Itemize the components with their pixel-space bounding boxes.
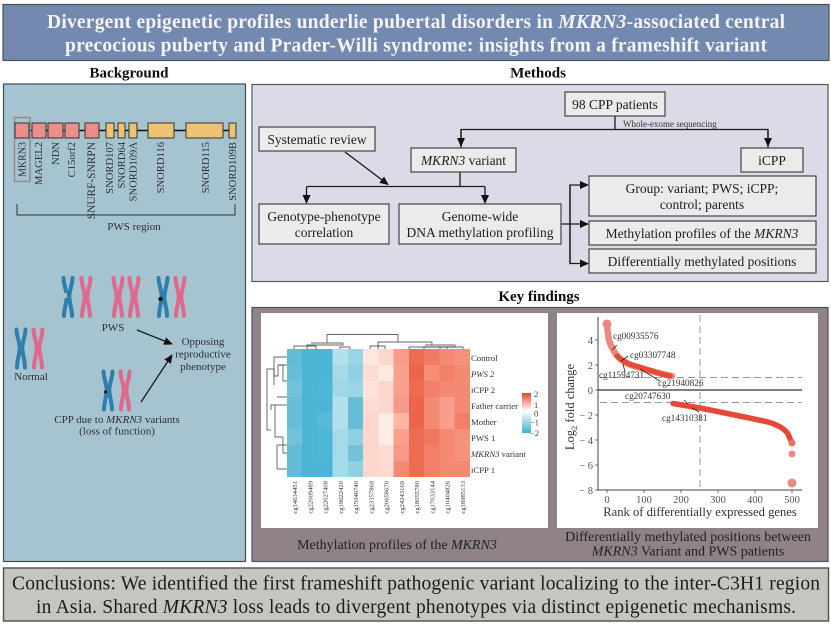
heatmap row labels: MKRN3 variant	[470, 449, 526, 459]
chromosomes: CPP pair	[104, 372, 130, 410]
axes	[595, 317, 802, 493]
top dendrogram	[294, 334, 463, 349]
box: differentially methylated positions: Differentially methylated positions	[608, 254, 796, 269]
colour scale legend: −1	[530, 418, 539, 428]
heatmap column labels: cg19622420	[338, 480, 345, 514]
probe labels and leader lines: cg00935576	[613, 331, 659, 341]
box: differentially methylated positions	[589, 249, 816, 273]
gene map of the PWS region: PWS region	[107, 221, 161, 233]
box: systematic review	[259, 127, 375, 151]
x axis ticks	[604, 495, 800, 506]
probe labels and leader lines: cg20747630	[625, 391, 671, 401]
heatmap column labels: cg10404826	[444, 480, 452, 514]
heatmap plot	[261, 313, 548, 528]
y axis ticks: − 6	[579, 461, 593, 472]
label: opposing reproductive phenotype: reproductive	[175, 348, 231, 360]
title banner	[3, 4, 829, 60]
colour scale legend: 1	[534, 400, 538, 410]
label: CPP due to MKRN3 variants: (loss of function)	[79, 426, 155, 438]
label: opposing reproductive phenotype: phenotype	[180, 361, 226, 373]
heatmap column labels: cg17033144	[430, 480, 436, 514]
label: whole-exome sequencing: Whole-exome sequencing	[623, 119, 717, 129]
heatmap row labels: Mother	[471, 417, 497, 427]
heading: Methods: Methods	[510, 66, 566, 82]
gene map of the PWS region: SNORD116	[156, 142, 167, 193]
chromosomes: normal pair	[16, 330, 42, 368]
gene map of the PWS region: SNORD115	[201, 142, 212, 193]
probe labels and leader lines: cg14310381	[662, 413, 708, 423]
box: genome-wide DNA methylation profiling: Genome-wide	[442, 209, 518, 224]
box: 98 CPP patients	[565, 92, 665, 116]
box: MKRN3 variant: MKRN3 variant	[420, 153, 506, 168]
heading: Key findings: Key findings	[498, 289, 580, 305]
heatmap column labels: cg22027408	[322, 480, 330, 514]
box: genotype-phenotype correlation	[259, 204, 389, 244]
arrow: CPP to phenotype	[141, 355, 172, 402]
x axis ticks: 200	[673, 495, 689, 506]
colour scale legend	[522, 389, 539, 438]
heatmap row labels	[470, 353, 526, 475]
x axis ticks: 0	[604, 495, 610, 506]
title banner: Divergent epigenetic profiles underlie pubertal disorders in MKRN3-associated central	[47, 12, 786, 33]
heatmap row labels: iCPP 1	[471, 465, 495, 475]
x axis ticks: 400	[747, 495, 763, 506]
heading: Background: Background	[90, 66, 169, 82]
probe labels and leader lines: cg11594731	[599, 370, 644, 380]
y axis ticks: − 2	[579, 411, 593, 422]
conclusions banner: in Asia. Shared MKRN3 loss leads to divergent phenotypes via distinct epigenetic mechanisms.	[36, 597, 796, 618]
caption: methylation profiles: Methylation profiles of the MKRN3	[297, 538, 497, 553]
label: Normal: Normal	[14, 371, 48, 383]
box: systematic review: Systematic review	[267, 132, 367, 147]
box: 98 CPP patients: 98 CPP patients	[572, 97, 658, 112]
probe labels and leader lines: cg03307748	[630, 350, 676, 360]
chromosomes: PWS deletion pair	[62, 278, 90, 316]
y axis ticks: 2	[588, 361, 593, 372]
y axis title: 2	[569, 426, 579, 430]
conclusions banner	[4, 568, 828, 621]
y axis ticks	[579, 336, 594, 497]
caption: differentially methylated positions: Differentially methylated positions between	[565, 530, 811, 545]
box: genotype-phenotype correlation: Genotype-phenotype	[267, 209, 381, 224]
flow connectors	[306, 116, 768, 264]
box: MKRN3 variant	[411, 148, 516, 172]
heatmap row labels: PWS 2	[470, 369, 495, 379]
box: iCPP: iCPP	[758, 153, 786, 168]
heatmap column labels: cg15046740	[353, 480, 360, 514]
label: PWS: PWS	[102, 322, 124, 334]
heatmap column labels: cg14634451	[292, 481, 299, 514]
heatmap column labels	[292, 480, 467, 514]
box: methylation profiles: Methylation profiles of the MKRN3	[606, 226, 799, 241]
probe labels and leader lines: cg21940826	[658, 378, 704, 388]
arrow: PWS to phenotype	[137, 330, 172, 344]
y axis ticks: 4	[588, 336, 594, 347]
gene map of the PWS region: SNORD109B	[228, 142, 239, 201]
box: group: Group: variant; PWS; iCPP;	[626, 181, 778, 196]
box: methylation profiles	[589, 221, 816, 245]
gene map of the PWS region: C15orf2	[67, 142, 78, 177]
label: CPP due to MKRN3 variants: CPP due to MKRN3 variants	[54, 414, 180, 426]
y axis title: fold change	[563, 363, 577, 426]
heatmap cells	[287, 349, 470, 477]
chromosomes: PWS maternal disomy pair	[114, 278, 138, 316]
heatmap column labels: cg18985133	[460, 480, 467, 514]
box: iCPP	[741, 148, 803, 172]
x axis title: Rank of differentially expressed genes	[603, 505, 797, 519]
gene map of the PWS region: MKRN3	[18, 142, 28, 177]
colour scale legend: −2	[530, 428, 539, 438]
gene map of the PWS region	[14, 118, 239, 233]
box: group	[589, 176, 816, 216]
x axis ticks: 300	[710, 495, 726, 506]
gene map of the PWS region: SNORD109A	[128, 142, 140, 201]
y axis ticks: 0	[588, 386, 593, 397]
box: genotype-phenotype correlation: correlation	[295, 225, 353, 240]
heatmap column labels: cg20658670	[384, 480, 390, 514]
title banner: precocious puberty and Prader-Willi syndrome: insights from a frameshift variant	[65, 36, 768, 56]
gene map of the PWS region: MAGEL2	[34, 142, 45, 185]
conclusions banner: Conclusions: We identified the first frameshift pathogenic variant localizing to the inter-C3H1 region	[12, 574, 820, 594]
heatmap column labels: cg24243169	[399, 480, 406, 514]
x axis ticks: 500	[784, 495, 800, 506]
scatter plot: ranked log2 fold change	[557, 313, 818, 528]
heatmap column labels: cg18055780	[414, 480, 421, 514]
heatmap row labels: Control	[471, 353, 498, 363]
caption: differentially methylated positions: MKRN3 Variant and PWS patients	[592, 544, 784, 560]
gene map of the PWS region: SNURF-SNRPN	[86, 142, 98, 219]
gene map of the PWS region: SNORD64	[117, 141, 128, 189]
left dendrogram	[267, 357, 288, 469]
y axis title: Log	[563, 430, 577, 450]
heatmap row labels: PWS 1	[471, 433, 495, 443]
heatmap row labels: Father carrier	[471, 401, 518, 411]
probe labels and leader lines	[599, 331, 708, 423]
y axis ticks: − 8	[579, 486, 593, 497]
gene map of the PWS region: NDN	[51, 142, 62, 165]
box: genome-wide DNA methylation profiling	[399, 204, 561, 244]
gene map of the PWS region: SNORD107	[105, 142, 116, 194]
threshold guide lines	[600, 315, 802, 490]
heatmap column labels: cg22009489	[308, 480, 314, 514]
data points	[602, 320, 796, 488]
box: genome-wide DNA methylation profiling: DNA methylation profiling	[407, 225, 554, 240]
heatmap column labels: cg23357869	[368, 480, 376, 514]
x axis ticks: 100	[636, 495, 652, 506]
label: opposing reproductive phenotype: Opposing	[182, 336, 225, 348]
panel: methods	[252, 84, 828, 282]
panel: key findings	[252, 308, 828, 562]
y axis ticks: − 4	[579, 436, 594, 447]
heatmap row labels: iCPP 2	[471, 385, 495, 395]
colour scale legend: 2	[534, 389, 538, 399]
chromosomes: PWS imprinting pair	[158, 278, 184, 316]
panel: background	[4, 84, 246, 562]
box: group: control; parents	[660, 197, 744, 212]
colour scale legend: 0	[534, 408, 538, 418]
